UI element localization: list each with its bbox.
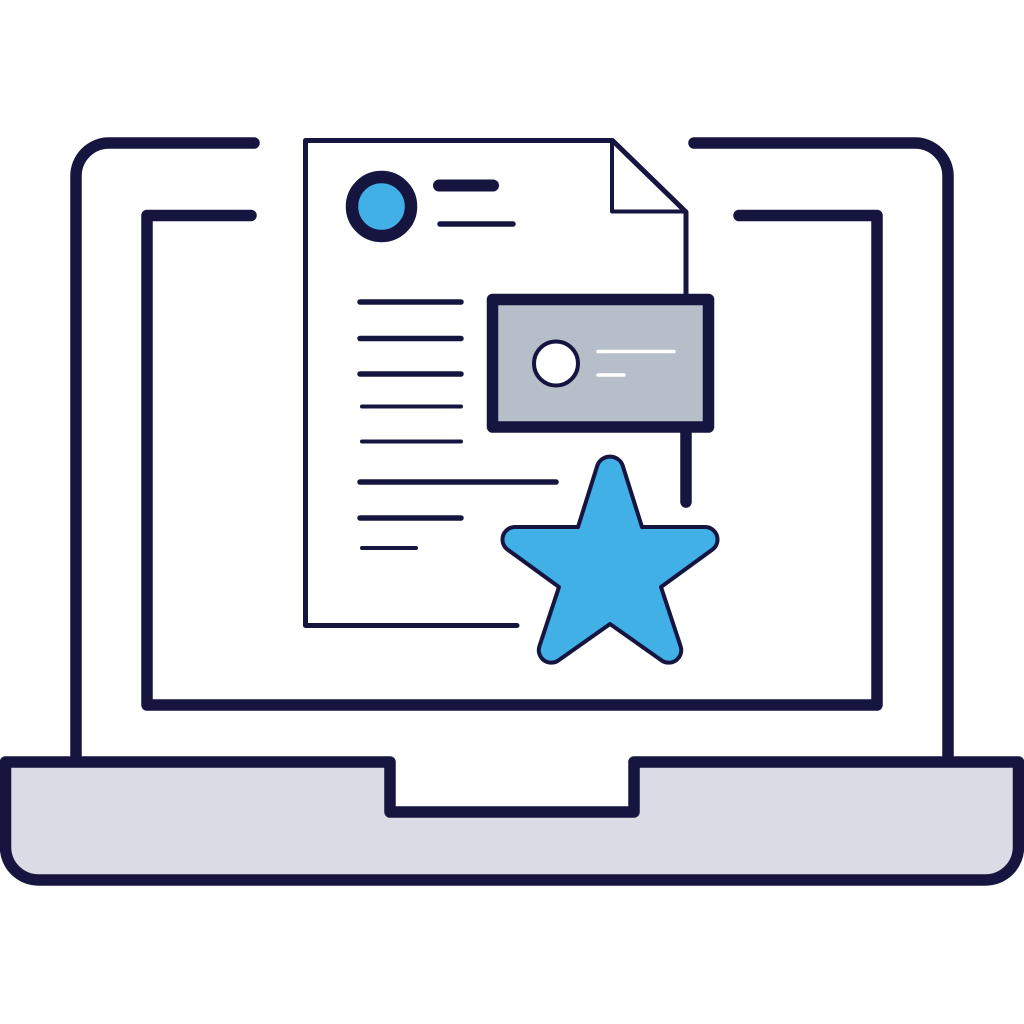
document	[306, 140, 686, 626]
document outline	[306, 140, 686, 626]
document edge below card	[680, 432, 692, 502]
card lines	[598, 352, 674, 375]
card avatar	[534, 342, 578, 386]
laptop screen outer frame	[76, 143, 948, 762]
document avatar	[352, 177, 411, 236]
document text lines	[360, 302, 556, 548]
document page fold	[612, 140, 686, 212]
document header lines	[439, 186, 513, 224]
laptop screen inner frame	[147, 216, 877, 705]
icon: star	[502, 457, 717, 663]
laptop base	[6, 762, 1018, 880]
card background	[492, 300, 708, 427]
profile card	[492, 300, 708, 427]
